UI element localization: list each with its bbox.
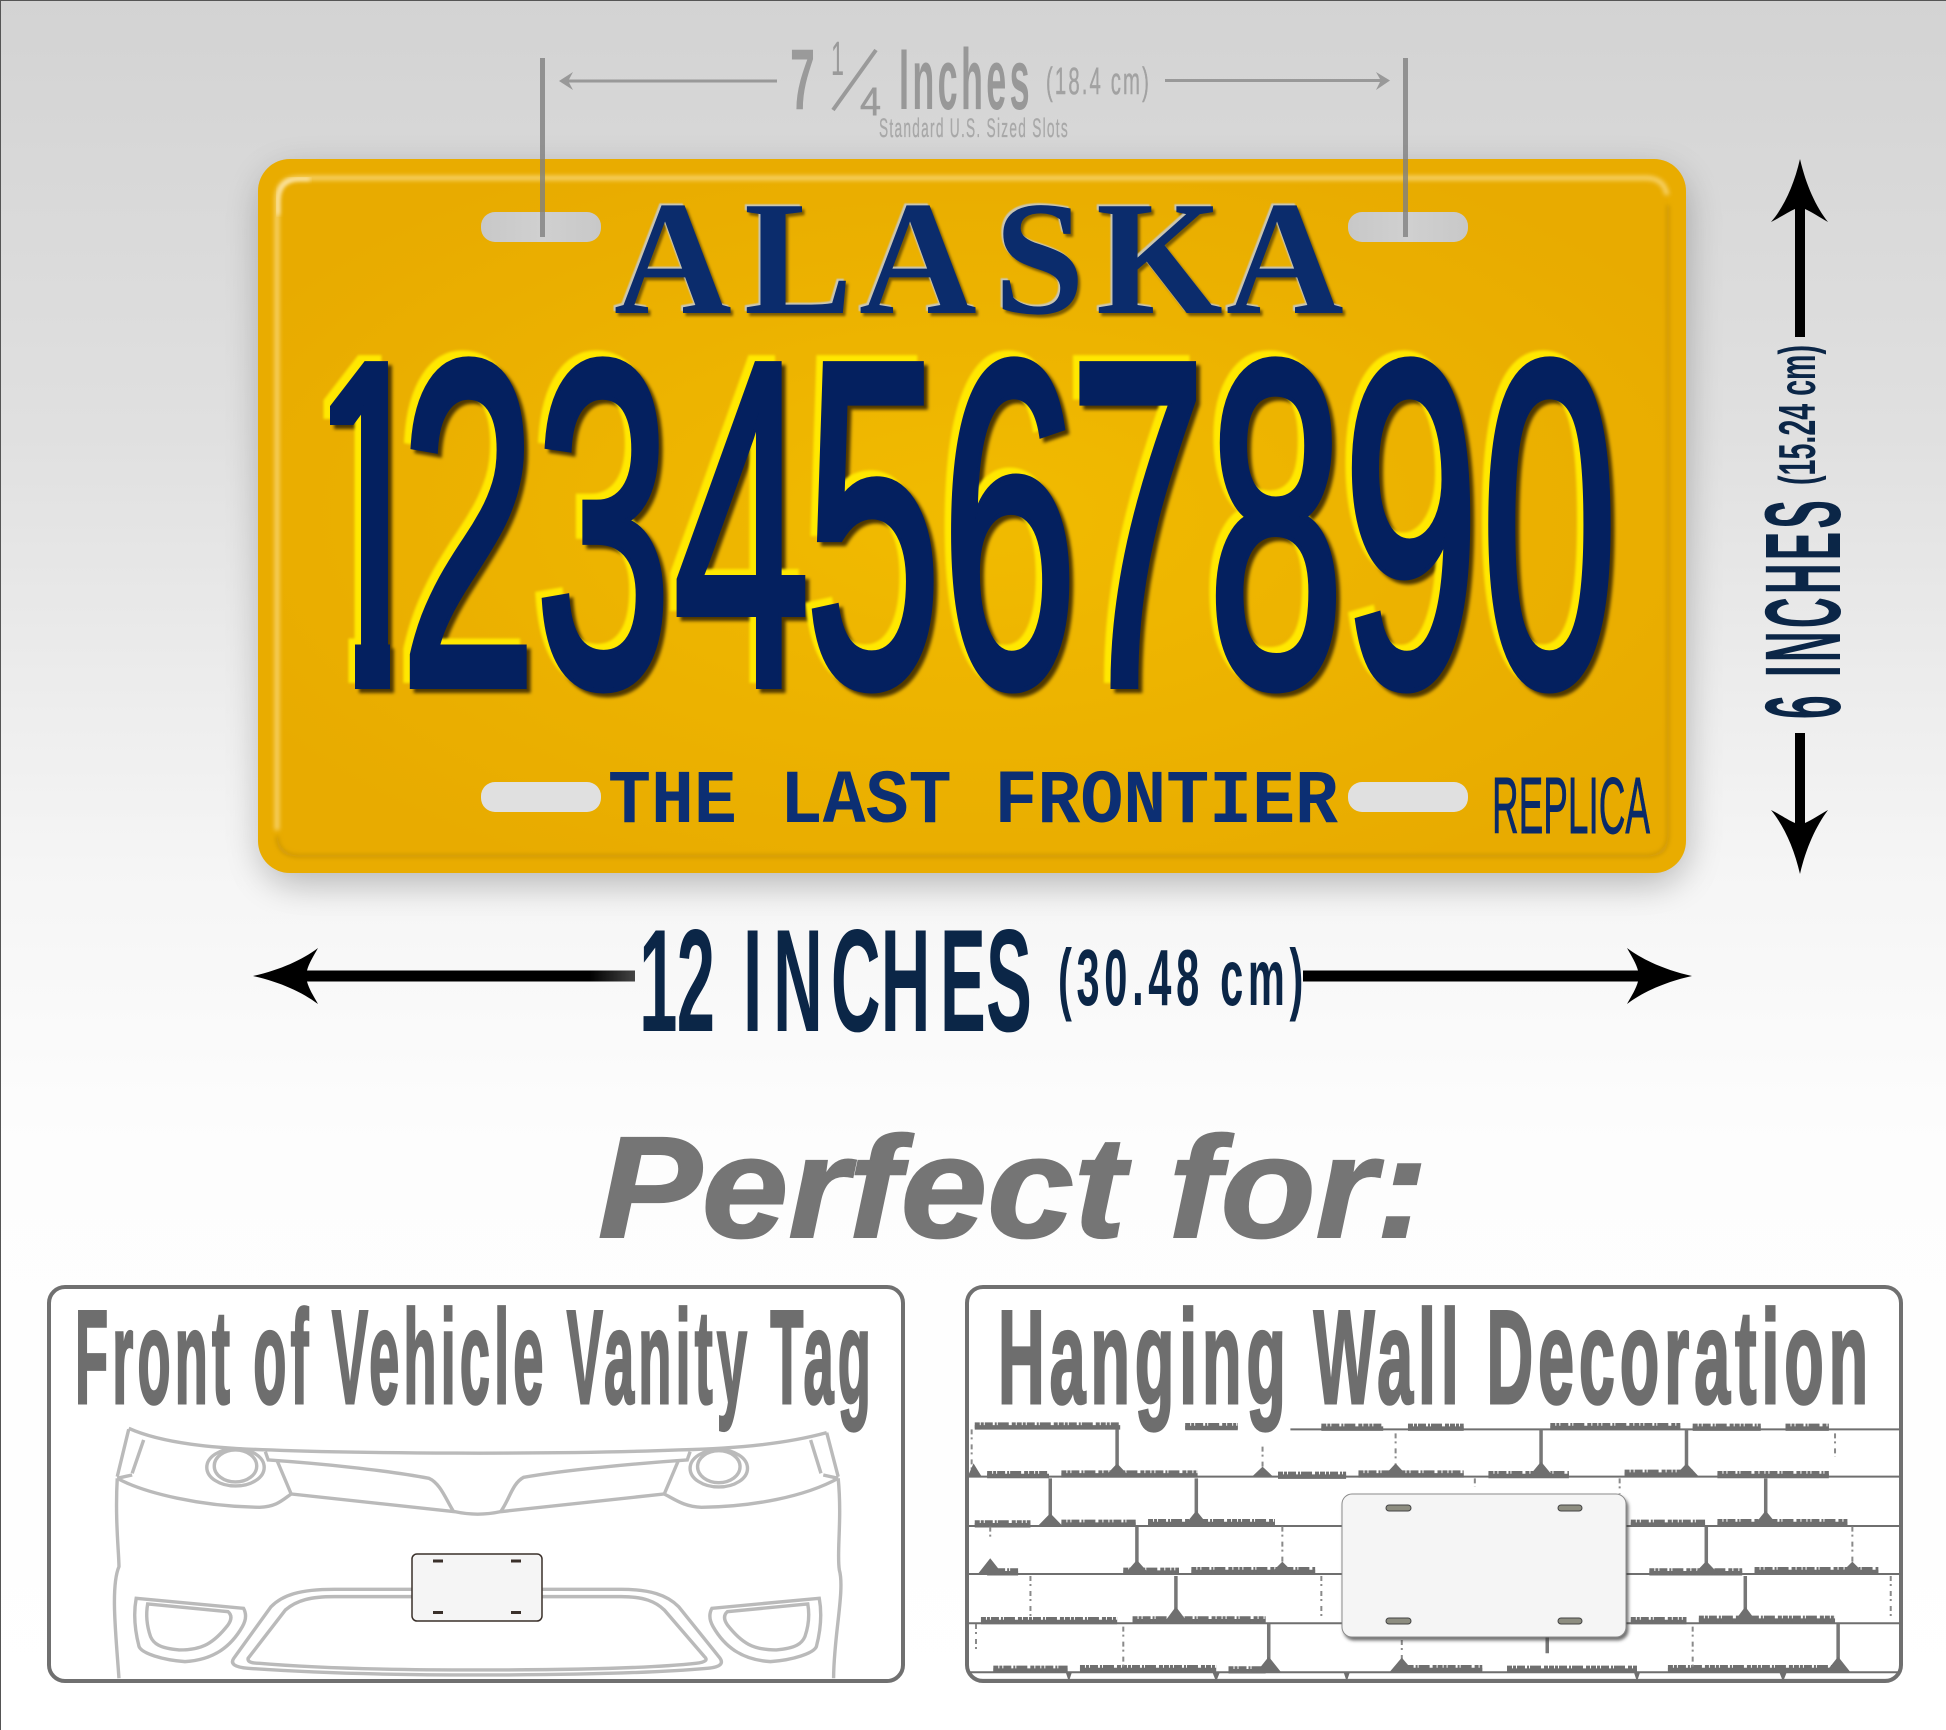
width metric label: (30.48 cm) (1058, 933, 1308, 1022)
brick wall (967, 1425, 1903, 1683)
plate number (322, 349, 1617, 700)
mounting slot: bottom left (481, 782, 601, 812)
slot spacing label: 1 (831, 33, 844, 86)
arrow: width right (1303, 948, 1692, 1004)
car line drawing (114, 1428, 841, 1678)
mini plate on car (412, 1554, 542, 1621)
mounting slot: top left (481, 212, 601, 242)
slot spacing label (790, 32, 1151, 128)
mounting slot: top right (1348, 212, 1468, 242)
mounting slot: bottom right (1348, 782, 1468, 812)
arrow: left slot (559, 72, 777, 90)
license plate: REPLICA (1492, 761, 1650, 850)
panel: wall decoration (967, 1284, 1903, 1683)
width dimension (253, 900, 1692, 1063)
heading: perfect for: Perfect for: (598, 1107, 1428, 1268)
panel: front of vehicle (49, 1284, 903, 1681)
height dimension: 6 INCHES (1742, 497, 1863, 719)
slot guide line: left (540, 58, 545, 237)
slogan: THE LAST FRONTIER (608, 759, 1338, 845)
state name: ALASKA (614, 169, 1344, 349)
slot spacing label: Inches (899, 32, 1033, 128)
slot standard note: Standard U.S. Sized Slots (879, 113, 1069, 143)
slot spacing dimension (540, 32, 1408, 237)
mini plate on wall (1342, 1494, 1626, 1637)
slot guide line: right (1403, 58, 1408, 237)
slot spacing label: 4 (860, 80, 881, 124)
plate number: 1 (302, 267, 438, 783)
arrow: width left (253, 948, 635, 1004)
width label: 12 INCHES (639, 900, 1032, 1063)
slot spacing label: 7 (790, 32, 815, 128)
arrow: height up (1771, 159, 1828, 337)
plate number: 234567890 (400, 267, 1618, 783)
height metric label: (15.24 cm) (1769, 345, 1827, 485)
license plate (258, 159, 1686, 884)
arrow: height down (1771, 733, 1828, 874)
slot spacing label: (18.4 cm) (1046, 61, 1151, 103)
arrow: right slot (1165, 72, 1390, 90)
